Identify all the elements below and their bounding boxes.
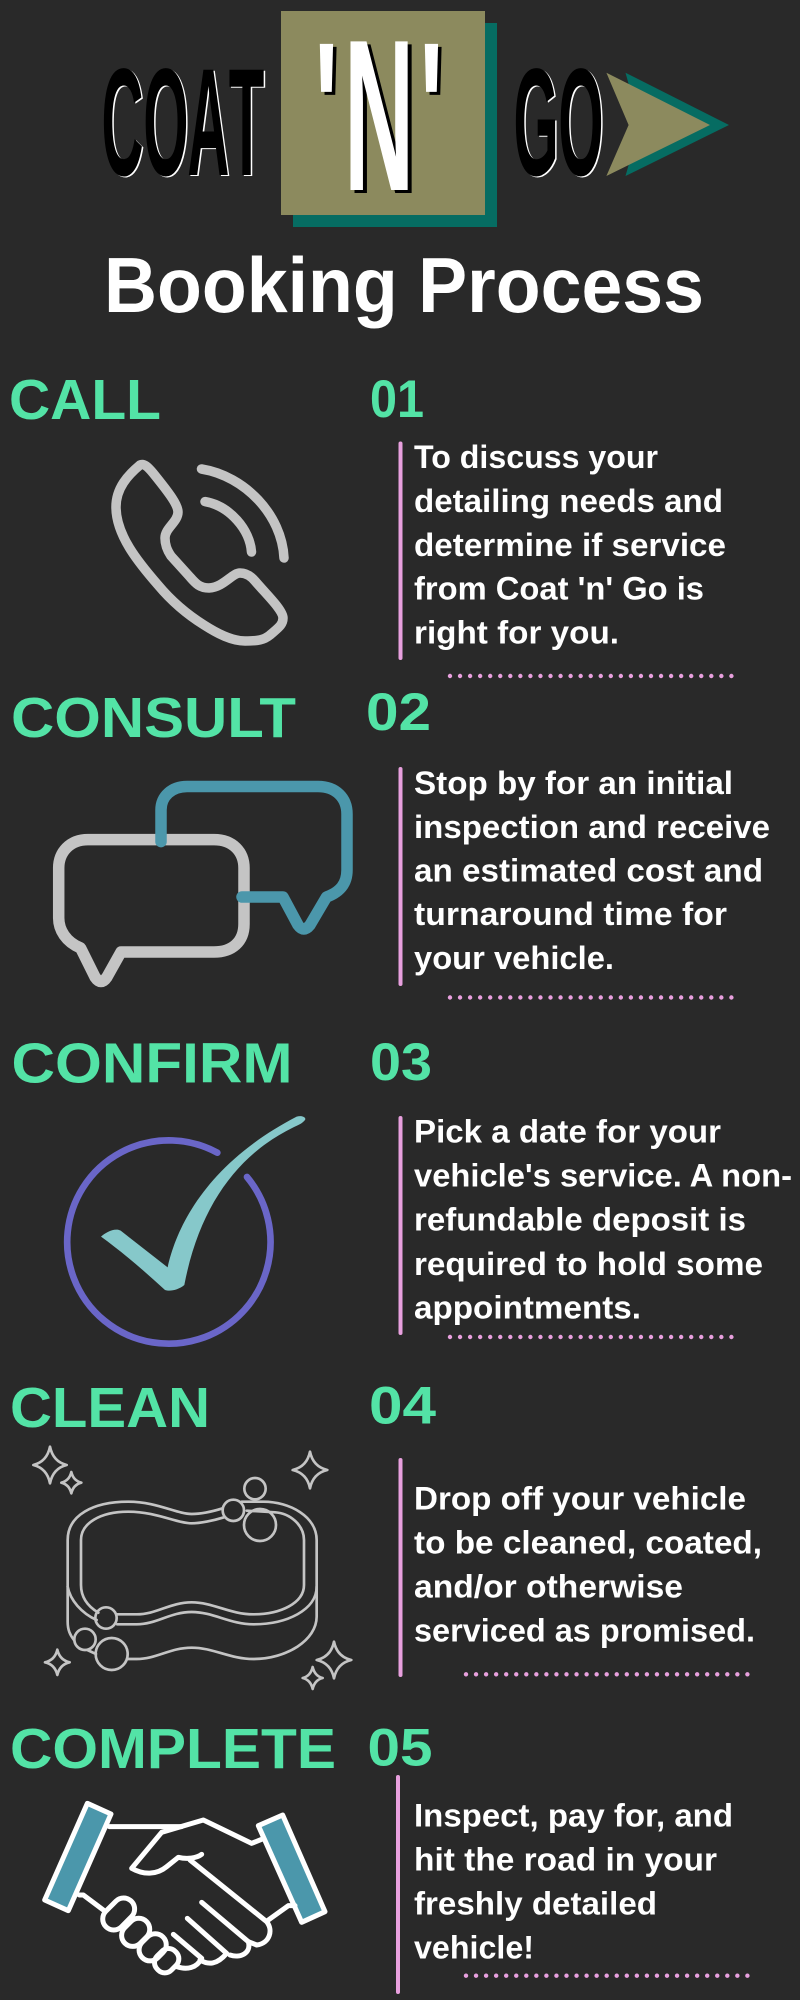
icon: speech bubbles: [59, 786, 347, 982]
description text: determine if service: [414, 527, 726, 563]
logo word: COAT: COAT: [102, 36, 264, 208]
description text: refundable deposit is: [414, 1202, 746, 1238]
description text: turnaround time for: [414, 896, 727, 932]
logo letter: 'N': ': [423, 6, 447, 220]
number 01: 01: [370, 370, 424, 429]
title: Booking Process: [104, 241, 704, 329]
description text: required to hold some: [414, 1246, 763, 1282]
description text: Inspect, pay for, and: [414, 1798, 733, 1834]
description text: your vehicle.: [414, 940, 614, 976]
accent bar: [396, 1775, 400, 1994]
description text: detailing needs and: [414, 483, 723, 519]
logo word: GO: GO: [514, 36, 604, 208]
description text: serviced as promised.: [414, 1612, 755, 1648]
heading: CONFIRM: CONFIRM: [12, 1032, 292, 1096]
description text: Stop by for an initial: [414, 765, 733, 801]
panel: step 1 call: [9, 368, 726, 660]
description text: from Coat 'n' Go is: [414, 570, 704, 606]
description text: [414, 1114, 792, 1326]
icon: check mark in circle: [67, 1116, 305, 1344]
logo letter: 'N': ': [318, 6, 342, 220]
description text: vehicle's service. A non-: [414, 1158, 792, 1194]
description text: inspection and receive: [414, 809, 770, 845]
description text: Drop off your vehicle: [414, 1480, 746, 1516]
description text: [414, 1798, 733, 1966]
description text: an estimated cost and: [414, 852, 763, 888]
description text: right for you.: [414, 614, 619, 650]
description text: to be cleaned, coated,: [414, 1524, 762, 1560]
heading: COMPLETE: COMPLETE: [10, 1717, 336, 1781]
description text: [414, 765, 770, 976]
description text: To discuss your: [414, 439, 658, 475]
description text: [414, 439, 726, 650]
heading: CLEAN: CLEAN: [10, 1376, 210, 1440]
logo letter: 'N': ': [420, 3, 443, 217]
logo: [102, 0, 729, 239]
logo letter: 'N': [314, 0, 447, 239]
logo arrow: [606, 73, 729, 176]
description text: hit the road in your: [414, 1842, 717, 1878]
icon: telephone: [116, 464, 284, 641]
icon: handshake: [45, 1803, 325, 1977]
description text: appointments.: [414, 1290, 641, 1326]
logo word: GO: GO: [515, 37, 605, 209]
logo letter: 'N': N: [344, 0, 414, 236]
heading: CONSULT: CONSULT: [11, 686, 296, 750]
heading: CALL: CALL: [9, 368, 161, 432]
accent bar: [398, 767, 402, 986]
description text: and/or otherwise: [414, 1568, 683, 1604]
description text: vehicle!: [414, 1930, 534, 1966]
accent bar: [398, 442, 402, 660]
panel: step 2 consult: [11, 683, 770, 986]
accent bar: [398, 1458, 402, 1677]
icon: sponge with bubbles and sparkles: [33, 1447, 351, 1689]
number 05: 05: [368, 1718, 432, 1778]
description text: Pick a date for your: [414, 1114, 721, 1150]
accent bar: [398, 1116, 402, 1335]
panel: step 4 clean: [10, 1376, 762, 1689]
description text: [414, 1480, 762, 1648]
description text: freshly detailed: [414, 1886, 657, 1922]
logo square with teal shadow: [281, 11, 497, 227]
number 04: 04: [369, 1376, 437, 1436]
logo letter: 'N': N: [348, 0, 418, 239]
panel: step 3 confirm: [12, 1032, 792, 1344]
logo letter: 'N': ': [314, 3, 338, 217]
number 02: 02: [366, 683, 431, 742]
logo word: COAT: COAT: [103, 37, 266, 209]
number 03: 03: [370, 1033, 432, 1092]
panel: step 5 complete: [10, 1717, 733, 1994]
